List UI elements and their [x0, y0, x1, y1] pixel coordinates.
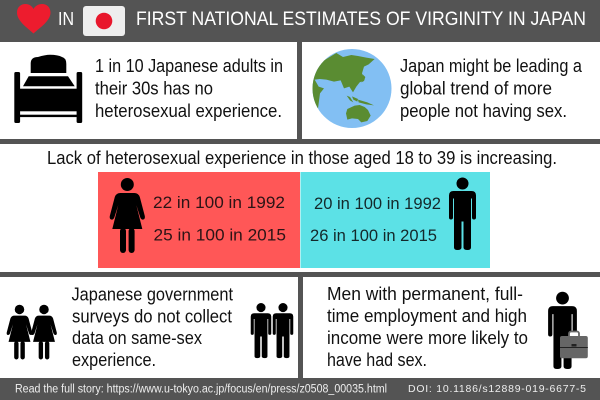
text: same-sex data [72, 284, 233, 370]
panel: one in ten adults [0, 42, 297, 139]
panel: women figures [98, 172, 300, 268]
icon: man [449, 178, 476, 250]
text: employment: time employment and high [327, 306, 527, 326]
text: women 2015: 25 in 100 in 2015 [154, 226, 286, 244]
text: men 1992: 20 in 100 in 1992 [314, 194, 441, 213]
header word: in: IN [58, 8, 74, 29]
icon: two men [251, 303, 293, 358]
icon: man with briefcase [548, 292, 588, 369]
icon: woman [110, 178, 145, 253]
panel: rising inexperience [0, 144, 600, 272]
heading: rising trend: Lack of heterosexual experience in those aged 18 to 39 is increasing. [47, 148, 557, 168]
text: one in ten [95, 56, 283, 121]
icon: red heart [17, 4, 50, 34]
panel: same-sex data [0, 277, 298, 378]
text: one in ten: their 30s has no [95, 78, 213, 98]
text: same-sex data: data on same-sex [72, 328, 202, 348]
text: employment: Men with permanent, full- [327, 284, 523, 304]
panel: men figures [300, 172, 490, 268]
text: global trend: people not having sex. [400, 101, 567, 121]
icon: bed [14, 55, 82, 123]
header bar [0, 0, 600, 42]
text: one in ten: heterosexual experience. [95, 101, 282, 121]
icon: two women [7, 305, 57, 359]
panel: global trend [302, 42, 600, 139]
text: DOI: DOI: 10.1186/s12889-019-6677-5 [408, 383, 586, 395]
text: global trend: Japan might be leading a [400, 56, 583, 76]
text: men 2015: 26 in 100 in 2015 [310, 226, 437, 245]
text: one in ten: 1 in 10 Japanese adults in [95, 56, 283, 76]
text: global trend [400, 56, 583, 121]
text: employment: have had sex. [327, 350, 427, 370]
icon: Japanese flag [83, 6, 125, 36]
footer bar [0, 378, 600, 400]
text: global trend: global trend of more [400, 78, 552, 98]
text: same-sex data: surveys do not collect [72, 306, 232, 326]
text: same-sex data: Japanese government [72, 284, 233, 304]
icon: globe [311, 49, 392, 128]
text: women 1992: 22 in 100 in 1992 [153, 193, 285, 212]
text: same-sex data: experience. [72, 350, 156, 370]
text: employment [327, 284, 528, 370]
panel: employment [303, 277, 600, 378]
text: story link: Read the full story: https://www.u-tokyo.ac.jp/focus/en/press/z0508_00035.html [15, 384, 387, 396]
text: employment: income were more likely to [327, 328, 528, 348]
